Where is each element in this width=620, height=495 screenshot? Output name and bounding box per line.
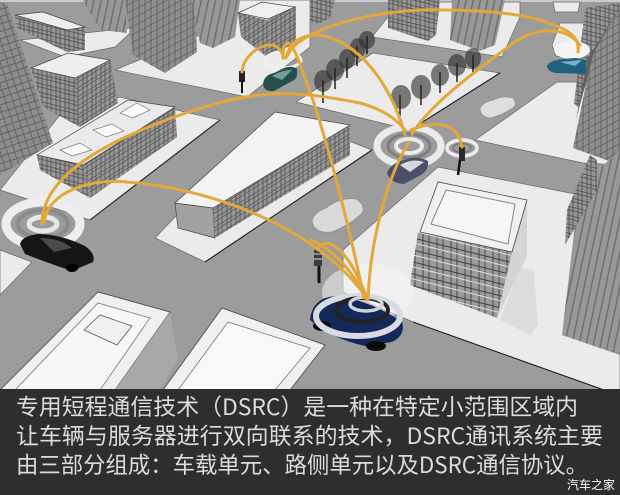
- dark kerb shadows: [90, 73, 604, 390]
- signal halo: main car: [322, 264, 414, 320]
- building: tall left tower: [0, 2, 53, 175]
- signal rings: left car: [6, 202, 80, 246]
- kerb: left block: [90, 120, 220, 220]
- car: black left: [20, 234, 94, 272]
- signal rings: roadside unit right: [447, 140, 477, 156]
- block: top-left: [20, 28, 130, 57]
- arc: post to teal car: [242, 45, 284, 72]
- building: top-left corner cluster: [310, 0, 335, 24]
- caption line 1: 专用短程通信技术（DSRC）是一种在特定小范围区域内: [16, 389, 578, 422]
- building: long low left: [37, 100, 177, 198]
- building: pale tower top: [83, 0, 127, 33]
- arc: centre loop to main car: [311, 240, 366, 298]
- tree row: left: [314, 31, 375, 103]
- city blocks: [0, 0, 620, 392]
- car: blue top right: [547, 58, 586, 74]
- signal rings: centre car: [377, 127, 441, 165]
- shadow under central building: [500, 268, 538, 335]
- caption text: [16, 389, 603, 480]
- signal halo: top right: [554, 41, 590, 59]
- block: top right upper: [553, 2, 580, 12]
- caption line 3: 由三部分组成：车载单元、路侧单元以及DSRC通信协议。: [16, 447, 588, 480]
- arc: centre car to right post: [411, 125, 462, 147]
- building: top-left low building: [15, 12, 85, 52]
- signal rings: main car: [316, 296, 400, 336]
- arc: left car to centre car: [42, 94, 405, 224]
- block: central with large building: [343, 167, 620, 392]
- arc: centre post to main car: [318, 243, 367, 298]
- building: top centre pair: [388, 0, 505, 51]
- block: top middle: [115, 0, 310, 97]
- building: mid-left cube: [31, 53, 118, 127]
- road surface: [0, 0, 620, 390]
- trees: [314, 31, 481, 116]
- building: tall centre tower: [125, 0, 197, 73]
- building: bottom-left white building: [0, 292, 178, 390]
- signal halo: teal car: [265, 52, 301, 68]
- block: top right lower: [552, 23, 586, 60]
- arc: left car to main car: [44, 181, 368, 300]
- block: long building block: [155, 112, 372, 262]
- kerb: long building block: [205, 150, 372, 262]
- building: lower right tower: [562, 150, 620, 355]
- watermark: 汽车之家: [567, 476, 615, 493]
- car: teal top: [263, 67, 297, 91]
- arc: teal car to centre car: [286, 35, 405, 135]
- car: navy centre: [387, 158, 428, 184]
- arc: centre car to top-right car: [412, 31, 580, 134]
- roadside unit: right post: [458, 147, 465, 175]
- DSRC communication arcs: [42, 10, 580, 300]
- building: block near teal car: [238, 2, 296, 57]
- block: top centre: [372, 2, 520, 57]
- kerb: tree block: [410, 73, 500, 130]
- car: main blue: [310, 296, 403, 351]
- building: striped tower: [192, 0, 240, 48]
- car: white left of centre: [312, 199, 363, 232]
- building: large central cube: [410, 182, 527, 318]
- arc: main car to centre car: [368, 142, 409, 300]
- building: top right towers: [573, 3, 620, 165]
- block: tree block: [296, 53, 500, 130]
- building: long central building: [175, 112, 350, 238]
- arc: teal car to top-right car: [288, 10, 578, 55]
- roadside unit: centre post: [314, 250, 322, 283]
- block: right: [475, 82, 620, 165]
- roadside unit: top post: [239, 71, 245, 93]
- tree row: right: [391, 48, 481, 116]
- caption line 2: 让车辆与服务器进行双向联系的技术，DSRC通讯系统主要: [16, 418, 603, 451]
- building: bottom-centre white building: [163, 308, 325, 390]
- arc: main car to teal car: [283, 43, 364, 298]
- car: white top right: [480, 97, 515, 118]
- kerb: central block: [413, 322, 604, 390]
- caption panel: [0, 389, 620, 495]
- block: small left: [0, 250, 32, 295]
- block: left, under long building: [0, 97, 220, 220]
